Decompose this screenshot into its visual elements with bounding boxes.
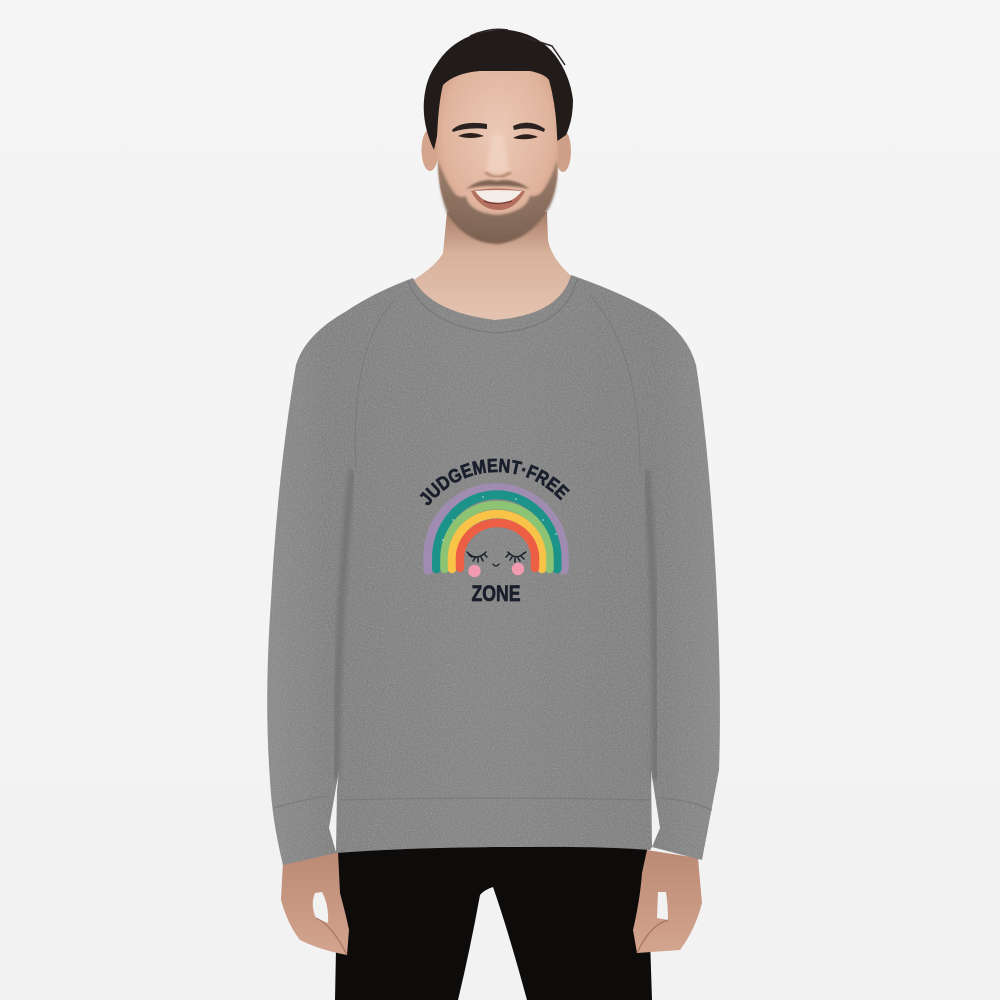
left hand <box>281 852 349 955</box>
right ear <box>555 130 571 172</box>
left cheek <box>468 565 481 577</box>
shirt folds and seams <box>274 295 712 810</box>
right hand <box>633 850 702 953</box>
left closed eye <box>467 552 487 562</box>
face <box>437 71 558 244</box>
collar <box>408 279 577 333</box>
nose <box>485 135 511 177</box>
rainbow bands <box>428 488 564 570</box>
right eye <box>513 134 538 139</box>
sleeve gaps <box>329 770 339 852</box>
rainbow graphic <box>420 458 570 606</box>
mouth <box>471 188 525 210</box>
head <box>422 29 573 244</box>
right cheek <box>512 563 524 575</box>
hair strands <box>470 29 565 65</box>
hair back <box>424 30 573 150</box>
right eyebrow <box>513 123 545 132</box>
left ear <box>422 129 438 171</box>
trousers <box>335 846 652 1000</box>
beard <box>438 160 557 244</box>
smile <box>493 564 499 566</box>
right closed eye <box>506 552 526 562</box>
sweatshirt <box>267 275 720 865</box>
left eyebrow <box>452 123 487 132</box>
neck <box>405 212 580 330</box>
arched heading: JUDGEMENT·FREE <box>420 458 570 506</box>
zone label: ZONE <box>472 581 520 606</box>
sparkle dots <box>442 496 557 541</box>
left eye <box>458 133 484 138</box>
